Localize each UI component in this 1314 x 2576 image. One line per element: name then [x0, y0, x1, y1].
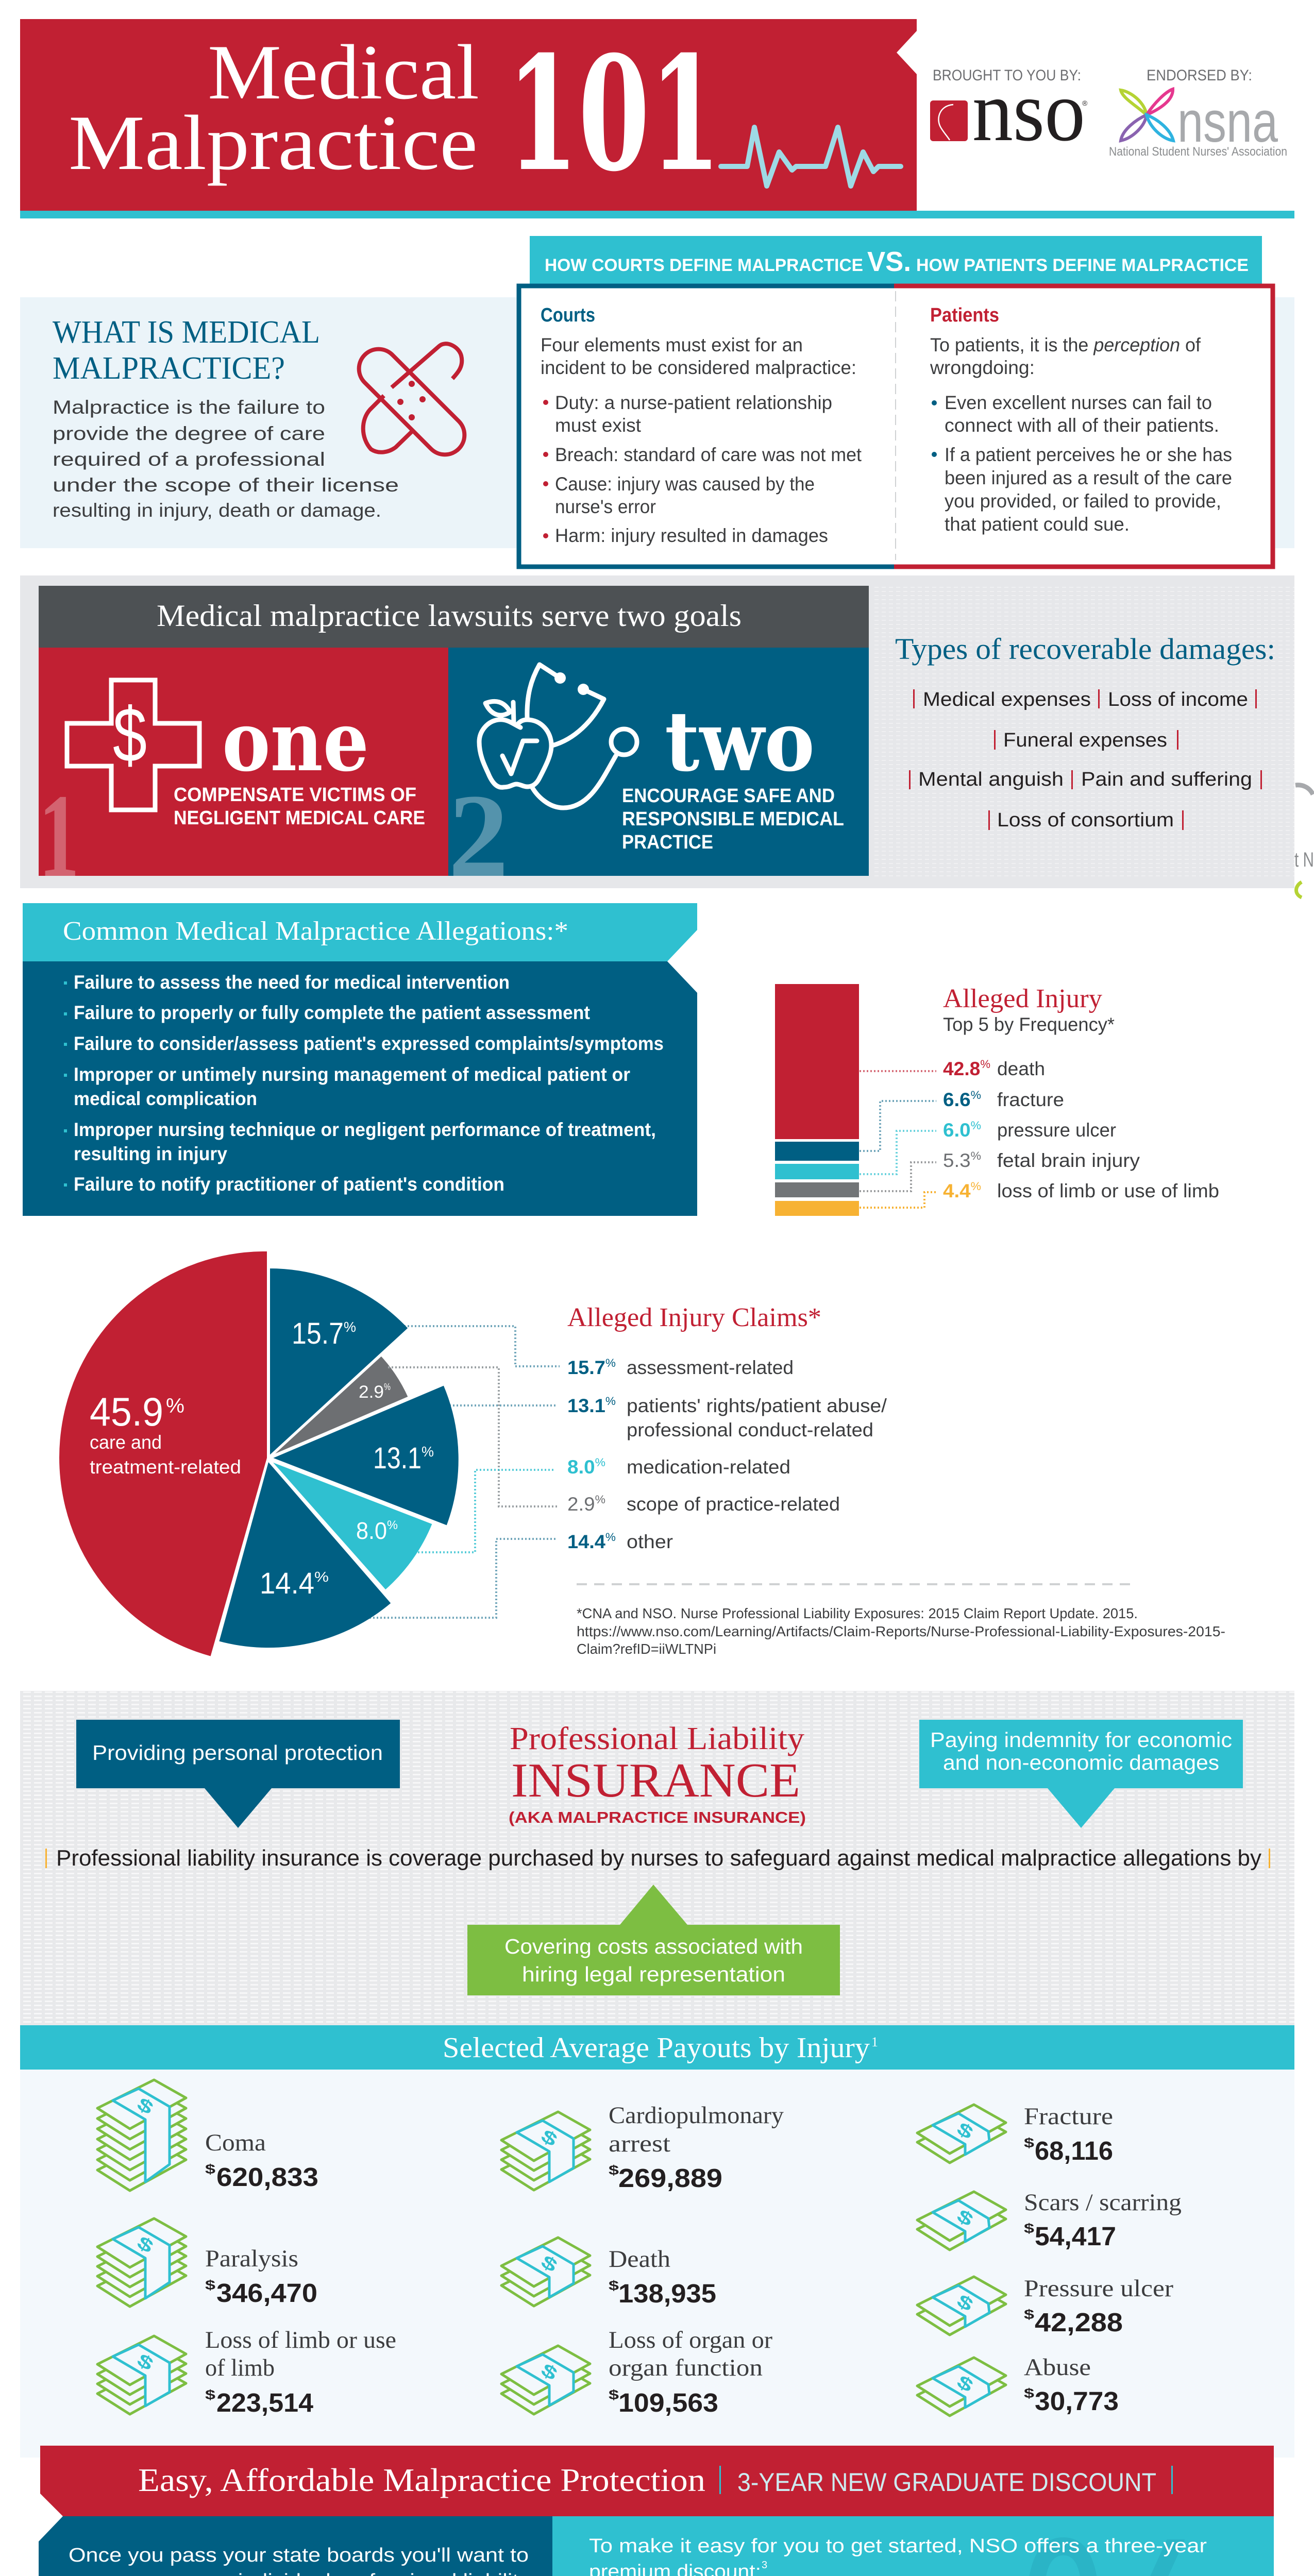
- legend rows: 15.7: [567, 1357, 604, 1378]
- red title ribbon: [20, 19, 917, 211]
- callout: legal representation: [467, 1885, 840, 1995]
- definition text: required of a professional: [53, 449, 325, 470]
- callout: legal representation: hiring legal representation: [522, 1962, 785, 1986]
- title: Medical Malpractice: [69, 29, 479, 186]
- payout: fracture: [1024, 2103, 1113, 2165]
- payout: paralysis: Paralysis: [205, 2245, 298, 2272]
- intro text: To make it easy for you to get started, NSO offers a three-year: [589, 2535, 1207, 2557]
- icon: money stack paralysis: $: [133, 2232, 157, 2257]
- payout: loss of limb: 223,514: [216, 2388, 314, 2417]
- legend rows: other: [627, 1531, 673, 1552]
- goal one text: COMPENSATE VICTIMS OF: [174, 784, 416, 806]
- definition text: Malpractice is the failure to: [53, 397, 325, 418]
- icon: heartbeat line: [721, 127, 901, 186]
- legend rows: 5.3: [943, 1150, 969, 1171]
- pie labels: %: [422, 1444, 434, 1460]
- icon: money stack death: $: [537, 2251, 561, 2276]
- heading: types of recoverable damages: Types of recoverable damages:: [895, 632, 1275, 666]
- panel: common malpractice allegations: [23, 903, 697, 1216]
- legend rows: fetal brain injury: [997, 1150, 1140, 1171]
- title: Medical Malpractice: Medical: [208, 29, 479, 115]
- icon: money stack loss of limb: $: [133, 2349, 157, 2375]
- card: goal one: [39, 648, 448, 876]
- callout: legal representation: Covering costs associated with: [504, 1935, 803, 1958]
- column: NSO policy: Once you pass your state boards you'll want to: [69, 2545, 529, 2566]
- chart: alleged injury top 5 stacked bar: [775, 984, 1219, 1216]
- column: courts: Breach: standard of care was not met: [555, 444, 862, 465]
- payout: death: $: [609, 2278, 619, 2293]
- heading: professional liability insurance: [509, 1721, 806, 1826]
- icon: apple and stethoscope: [479, 665, 637, 808]
- allegations list: Failure to consider/assess patient's expressed complaints/symptoms: [74, 1033, 664, 1054]
- payout: cardiopulmonary arrest: $: [609, 2162, 619, 2178]
- heading band: Selected Average Payouts by Injury: [443, 2032, 870, 2064]
- icon: money stack scars: [917, 2192, 1006, 2250]
- goal one text: NEGLIGENT MEDICAL CARE: [174, 807, 425, 829]
- payout: abuse: Abuse: [1024, 2354, 1091, 2381]
- legend rows: %: [605, 1531, 616, 1544]
- payout: loss of organ: organ function: [609, 2354, 763, 2381]
- pie labels: 15.7: [292, 1317, 344, 1350]
- source footnote: *CNA and NSO. Nurse Professional Liability Exposures: 2015 Claim Report Update. 2015.: [577, 1605, 1138, 1621]
- payout: pressure ulcer: $: [1024, 2307, 1035, 2322]
- brought to you by label: BROUGHT TO YOU BY:: [933, 67, 1081, 84]
- column: patients: [930, 304, 1232, 535]
- logo: NSNA butterfly: [1121, 89, 1173, 141]
- legend rows: %: [971, 1149, 981, 1162]
- legend rows: %: [605, 1395, 616, 1408]
- definition text: resulting in injury, death or damage.: [53, 500, 381, 521]
- icon: money stack coma: [97, 2080, 186, 2191]
- legend rows: %: [971, 1089, 981, 1101]
- payout: pressure ulcer: 42,288: [1035, 2308, 1123, 2337]
- icon: money stack loss of organ: $: [537, 2359, 561, 2384]
- allegations list: Failure to properly or fully complete the patient assessment: [74, 1002, 590, 1023]
- legend rows: 6.6: [943, 1089, 969, 1110]
- goal two text: RESPONSIBLE MEDICAL: [622, 808, 844, 830]
- column: courts: Harm: injury resulted in damages: [555, 525, 828, 546]
- column: courts: nurse's error: [555, 496, 656, 517]
- pie labels: care and: [90, 1432, 162, 1453]
- logo: nsna wordmark: nsna: [1177, 90, 1278, 154]
- legend rows: %: [595, 1493, 605, 1506]
- title: Medical Malpractice: Malpractice: [69, 99, 478, 186]
- icon: money stack cardiopulmonary arrest: $: [537, 2125, 561, 2150]
- legend rows: 42.8: [943, 1058, 980, 1079]
- column: patients: To patients, it is the perception of: [930, 334, 1201, 355]
- callout: personal protection: Providing personal protection: [92, 1741, 383, 1765]
- allegations list: [64, 972, 664, 1195]
- banner: how courts vs how patients define malpractice: HOW COURTS DEFINE MALPRACTICE: [545, 256, 863, 275]
- payout: cardiopulmonary arrest: arrest: [609, 2130, 670, 2157]
- logo: NSO: nso: [972, 63, 1085, 159]
- legend rows: %: [980, 1058, 990, 1071]
- payout: loss of limb: $: [205, 2387, 216, 2402]
- payout: death: Death: [609, 2246, 670, 2273]
- card: goal two: [448, 648, 869, 876]
- legend rows: %: [605, 1357, 616, 1369]
- payout: fracture: 68,116: [1035, 2136, 1113, 2165]
- icon: money stack fracture: [917, 2105, 1006, 2163]
- endorsed by label: ENDORSED BY:: [1147, 67, 1252, 84]
- allegations list: Improper nursing technique or negligent performance of treatment,: [74, 1119, 656, 1140]
- payout: scars: Scars / scarring: [1024, 2189, 1182, 2216]
- leader lines: [362, 1326, 560, 1618]
- icon: money stack fracture: $: [953, 2118, 977, 2143]
- icon: money stack cardiopulmonary arrest: [501, 2112, 590, 2190]
- callout: personal protection: [76, 1720, 400, 1828]
- pie labels: %: [384, 1382, 391, 1392]
- heading: [138, 2462, 1173, 2498]
- column: patients: connect with all of their patients.: [945, 415, 1219, 436]
- legend rows: pressure ulcer: [997, 1120, 1116, 1141]
- source footnote: https://www.nso.com/Learning/Artifacts/Claim-Reports/Nurse-Professional-Liability-Exposures-2015-: [577, 1623, 1225, 1639]
- callout: paying indemnity: Paying indemnity for economic: [930, 1728, 1232, 1752]
- pie labels: %: [344, 1319, 356, 1335]
- sponsor logos: [930, 63, 1287, 159]
- watermark numeral 2: 2: [448, 770, 509, 902]
- icon: medical cross with dollar: [67, 680, 199, 810]
- heading: two goals: Medical malpractice lawsuits serve two goals: [157, 599, 742, 633]
- legend rows: medication-related: [627, 1456, 790, 1478]
- heading: Alleged Injury Claims*: [567, 1303, 821, 1332]
- legend rows: patients' rights/patient abuse/: [627, 1395, 887, 1416]
- heading: professional liability insurance: (AKA MALPRACTICE INSURANCE): [509, 1808, 806, 1826]
- heading band: 1: [871, 2035, 878, 2049]
- column: courts: Four elements must exist for an: [541, 334, 803, 355]
- chart: alleged injury claims pie: [58, 1250, 1225, 1657]
- payout: fracture: Fracture: [1024, 2103, 1113, 2130]
- legend rows: 14.4: [567, 1531, 604, 1552]
- payout: cardiopulmonary arrest: 269,889: [618, 2163, 722, 2193]
- banner: how courts vs how patients define malpractice: HOW PATIENTS DEFINE MALPRACTICE: [916, 256, 1249, 275]
- pie labels: 8.0: [356, 1517, 387, 1544]
- subheading: Top 5 by Frequency*: [943, 1014, 1115, 1035]
- heading: Common Medical Malpractice Allegations:*: [63, 917, 568, 946]
- legend rows: loss of limb or use of limb: [997, 1180, 1219, 1201]
- column: courts: [541, 304, 862, 546]
- icon: money stack abuse: [917, 2358, 1006, 2416]
- payout: coma: $: [205, 2161, 216, 2177]
- payout: paralysis: $: [205, 2277, 216, 2293]
- association name: National Student Nurses' Association: [1109, 145, 1287, 159]
- column: courts: incident to be considered malpractice:: [541, 357, 856, 378]
- icon: crossed bandages: [351, 341, 473, 463]
- legend rows: 6.0: [943, 1120, 969, 1141]
- payout: loss of organ: 109,563: [618, 2388, 718, 2417]
- column: courts: Courts: [541, 304, 595, 326]
- pie labels: [90, 1317, 434, 1600]
- pie labels: 45.9: [90, 1389, 163, 1434]
- banner: how courts vs how patients define malpractice: VS.: [867, 246, 911, 277]
- legend rows: 13.1: [567, 1395, 604, 1416]
- goal two text: ENCOURAGE SAFE AND: [622, 785, 835, 807]
- goal two text: PRACTICE: [622, 832, 713, 853]
- pie labels: 2.9: [359, 1382, 384, 1402]
- heading: 3-YEAR NEW GRADUATE DISCOUNT: [737, 2468, 1156, 2497]
- word: one: one: [222, 693, 369, 790]
- panel: two goals and recoverable damages: [20, 575, 1294, 902]
- payout: abuse: 30,773: [1035, 2386, 1119, 2416]
- panel: what is medical malpractice: [20, 297, 1294, 548]
- icon: money stack pressure ulcer: [917, 2277, 1006, 2335]
- pie labels: %: [387, 1518, 398, 1532]
- definition text: under the scope of their license: [53, 474, 399, 496]
- heading: professional liability insurance: INSURANCE: [511, 1754, 800, 1807]
- payout: scars: 54,417: [1035, 2222, 1116, 2251]
- column: patients: If a patient perceives he or she has: [945, 444, 1232, 465]
- legend rows: scope of practice-related: [627, 1494, 840, 1515]
- icon: money stack pressure ulcer: $: [953, 2290, 977, 2315]
- list: recoverable damages: Loss of consortium: [997, 809, 1174, 831]
- legend rows: %: [971, 1180, 981, 1193]
- list: recoverable damages: Pain and suffering: [1081, 769, 1252, 790]
- source footnote: Claim?refID=iiWLTNPi: [577, 1641, 716, 1657]
- list: recoverable damages: Funeral expenses: [1003, 730, 1167, 751]
- legend rows: 8.0: [567, 1456, 594, 1478]
- panel: selected average payouts: [20, 2025, 1294, 2458]
- payout: coma: [205, 2129, 318, 2192]
- payout: abuse: [1024, 2354, 1119, 2416]
- definition text: [53, 397, 399, 521]
- logo: NSO: ®: [1082, 99, 1088, 107]
- pie labels: treatment-related: [90, 1456, 241, 1478]
- payout: scars: $: [1024, 2221, 1035, 2236]
- payout: death: [609, 2246, 716, 2308]
- allegations list: Improper or untimely nursing management of medical patient or: [74, 1064, 630, 1085]
- column: patients: you provided, or failed to provide,: [945, 490, 1221, 512]
- legend rows: %: [971, 1119, 981, 1132]
- payout: death: 138,935: [618, 2279, 716, 2308]
- word: two: two: [665, 693, 815, 790]
- payout: pressure ulcer: [1024, 2275, 1173, 2337]
- legend rows: assessment-related: [627, 1357, 794, 1378]
- pie labels: %: [314, 1569, 329, 1585]
- column: patients: wrongdoing:: [930, 357, 1035, 378]
- payout: loss of organ: Loss of organ or: [609, 2327, 772, 2353]
- goal two text: [622, 785, 844, 853]
- icon: money stack scars: $: [953, 2205, 977, 2230]
- heading: Alleged Injury: [943, 984, 1102, 1013]
- intro text: [589, 2535, 1207, 2576]
- payout: paralysis: 346,470: [216, 2278, 317, 2308]
- payout: abuse: $: [1024, 2385, 1035, 2401]
- legend rows: professional conduct-related: [627, 1419, 873, 1440]
- payout: loss of organ: [609, 2327, 772, 2417]
- pie labels: 14.4: [260, 1567, 314, 1600]
- legend rows: [567, 1357, 887, 1552]
- icon: money stack coma: $: [133, 2093, 157, 2119]
- icon: money stack paralysis: [97, 2218, 186, 2307]
- column: NSO policy: [39, 2516, 552, 2576]
- watermark numeral 1: 1: [39, 770, 79, 902]
- payout: loss of limb: Loss of limb or use: [205, 2327, 396, 2353]
- payout: scars: [1024, 2189, 1182, 2251]
- intro text: 3: [762, 2560, 767, 2571]
- heading: Easy, Affordable Malpractice Protection: [138, 2462, 705, 2498]
- heading: WHAT IS MEDICAL: [53, 315, 320, 350]
- payout: loss of limb: of limb: [205, 2354, 275, 2381]
- goal one text: [174, 784, 425, 829]
- icon: money stack death: [501, 2238, 590, 2306]
- legend rows: 4.4: [943, 1180, 969, 1201]
- column: courts: Cause: injury was caused by the: [555, 473, 815, 495]
- payout: cardiopulmonary arrest: [609, 2102, 784, 2193]
- heading: professional liability insurance: Professional Liability: [510, 1721, 804, 1756]
- column: courts: must exist: [555, 415, 642, 436]
- payout: cardiopulmonary arrest: Cardiopulmonary: [609, 2102, 784, 2129]
- pie slices: [58, 1250, 460, 1657]
- callout: paying indemnity: and non-economic damages: [943, 1751, 1219, 1774]
- stacked bar: [775, 984, 859, 1216]
- icon: medical cross with dollar: $: [113, 691, 147, 778]
- list: recoverable damages: Mental anguish: [918, 769, 1064, 790]
- allegations list: resulting in injury: [74, 1143, 227, 1164]
- legend rows: [943, 1058, 1219, 1201]
- allegations list: medical complication: [74, 1088, 257, 1109]
- icon: money stack loss of organ: [501, 2346, 590, 2414]
- column: patients: that patient could sue.: [945, 514, 1130, 535]
- list: recoverable damages: Medical expenses: [923, 689, 1091, 710]
- allegations list: Failure to assess the need for medical intervention: [74, 972, 510, 993]
- payout: loss of organ: $: [609, 2387, 619, 2402]
- column: courts: Duty: a nurse-patient relationship: [555, 392, 832, 413]
- heading: two goals: [39, 586, 869, 648]
- heading band: [20, 2025, 1294, 2070]
- definition sentence: Professional liability insurance is coverage purchased by nurses to safeguard against medical malpractice allegations by: [56, 1845, 1261, 1871]
- legend rows: %: [595, 1456, 605, 1469]
- panel: professional liability insurance: [20, 1691, 1294, 2025]
- payout: loss of limb: [205, 2327, 396, 2417]
- header banner: [20, 19, 1294, 218]
- title: 101: 101: [507, 22, 721, 206]
- icon: money stack abuse: $: [953, 2371, 977, 2396]
- definition text: provide the degree of care: [53, 423, 325, 444]
- leader lines: [852, 1071, 936, 1208]
- callout: paying indemnity: [919, 1720, 1243, 1828]
- pie labels: 13.1: [373, 1442, 422, 1475]
- column: patients: Even excellent nurses can fail to: [945, 392, 1212, 413]
- column: patients: been injured as a result of the care: [945, 467, 1232, 488]
- heading: MALPRACTICE?: [53, 351, 285, 386]
- payout: fracture: $: [1024, 2135, 1035, 2150]
- panel: easy affordable malpractice protection: [39, 2446, 1274, 2576]
- payout: coma: Coma: [205, 2129, 266, 2156]
- legend rows: 2.9: [567, 1494, 594, 1515]
- column: patients: Patients: [930, 304, 999, 326]
- payout: coma: 620,833: [216, 2162, 318, 2192]
- payout: pressure ulcer: Pressure ulcer: [1024, 2275, 1173, 2302]
- column: three-year discount: [552, 2466, 1274, 2576]
- stray logo fragments at right edge: [1294, 785, 1314, 897]
- payout: paralysis: [205, 2245, 317, 2308]
- heading: [53, 315, 320, 386]
- source footnote: [577, 1605, 1225, 1657]
- allegations list: Failure to notify practitioner of patient's condition: [74, 1174, 504, 1195]
- teal rule: [20, 211, 1294, 218]
- list: recoverable damages: [909, 689, 1262, 831]
- panel: courts vs patients: [516, 236, 1275, 569]
- legend rows: death: [997, 1058, 1045, 1079]
- icon: money stack loss of limb: [97, 2336, 186, 2414]
- list: recoverable damages: Loss of income: [1108, 689, 1248, 710]
- legend rows: fracture: [997, 1089, 1064, 1110]
- pie labels: %: [166, 1395, 184, 1417]
- banner: how courts vs how patients define malpractice: [530, 236, 1262, 284]
